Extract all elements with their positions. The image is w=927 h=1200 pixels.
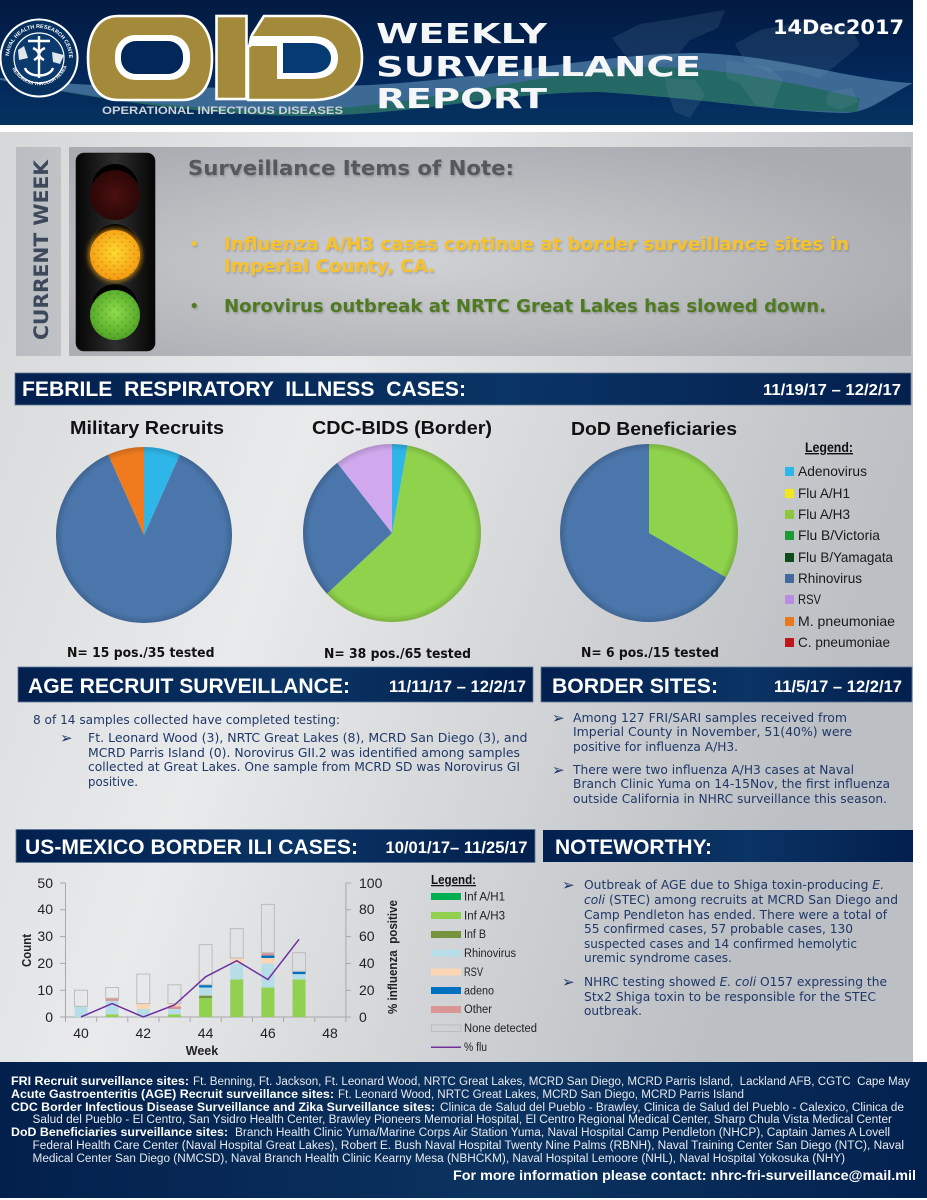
chart: border ILI cases by week bbox=[19, 875, 400, 1058]
right axis labels: 60 bbox=[359, 928, 375, 944]
left axis labels: 10 bbox=[37, 982, 53, 998]
week labels: 40 bbox=[73, 1025, 89, 1041]
heading: us-mexico border ili cases: 10/01/17– 11/25/17 bbox=[386, 839, 528, 857]
pie legend: Adenovirus bbox=[798, 463, 867, 479]
current week side label: CURRENT WEEK bbox=[30, 159, 53, 340]
panel: current week bbox=[16, 147, 911, 356]
pie legend: RSV bbox=[798, 591, 822, 607]
heading: age recruit surveillance bbox=[18, 667, 533, 702]
notes heading: Surveillance Items of Note: bbox=[188, 156, 514, 180]
chart title: CDC-BIDS (Border) bbox=[312, 418, 492, 438]
sample count: N= 6 pos./15 tested bbox=[581, 646, 719, 661]
text block: border sites: positive for influenza A/H3. bbox=[573, 740, 738, 754]
week labels: 44 bbox=[198, 1025, 214, 1041]
text block: noteworthy: NHRC testing showed E. coli O157 expressing the bbox=[584, 975, 887, 989]
text block: noteworthy: Outbreak of AGE due to Shiga toxin-producing E. bbox=[584, 878, 884, 892]
footer panel bbox=[0, 1062, 927, 1198]
heading: noteworthy bbox=[543, 830, 913, 862]
note: influenza, yellow: Imperial County, CA. bbox=[224, 257, 435, 277]
text block: noteworthy bbox=[562, 876, 898, 1018]
right axis labels bbox=[359, 875, 383, 1025]
text block: age recruit surveillance bbox=[33, 713, 528, 789]
chart legend: % flu bbox=[464, 1042, 487, 1054]
surveillance site lists: Acute Gastroenteritis (AGE) Recruit surveillance sites: bbox=[11, 1089, 334, 1101]
percent flu line bbox=[81, 939, 299, 1017]
current week side label bbox=[16, 147, 61, 356]
seal: Naval Health Research Center bbox=[0, 18, 78, 98]
pie legend: Flu B/Yamagata bbox=[798, 549, 893, 565]
chart legend: Inf A/H1 bbox=[464, 892, 505, 904]
note: influenza, yellow: • bbox=[189, 235, 199, 255]
surveillance site lists: Branch Health Clinic Yuma/Marine Corps Air Station Yuma, Naval Hospital Camp Pendleton (NHCP), Captain James A Lovell bbox=[235, 1127, 890, 1139]
week labels: 42 bbox=[136, 1025, 151, 1041]
chart legend: Inf A/H3 bbox=[464, 910, 505, 922]
left axis labels: 30 bbox=[37, 928, 53, 944]
surveillance site lists: CDC Border Infectious Disease Surveillance and Zika Surveillance sites: bbox=[11, 1102, 435, 1114]
pie legend: Flu A/H3 bbox=[798, 506, 850, 522]
pie chart: dod beneficiaries bbox=[560, 419, 738, 661]
text block: noteworthy: uremic syndrome cases. bbox=[584, 951, 732, 965]
surveillance notes panel background bbox=[69, 147, 911, 356]
heading: febrile respiratory illness cases bbox=[15, 373, 911, 405]
right axis labels: 100 bbox=[359, 875, 383, 891]
pie legend: Legend: bbox=[805, 439, 853, 455]
left axis labels: 50 bbox=[37, 875, 53, 891]
report title: WEEKLY bbox=[376, 18, 549, 50]
sample count: N= 38 pos./65 tested bbox=[324, 647, 471, 662]
logo caption: OPERATIONAL INFECTIOUS DISEASES bbox=[102, 105, 343, 117]
text block: age recruit surveillance: positive. bbox=[88, 775, 138, 789]
text block: noteworthy: coli (STEC) among recruits at MCRD San Diego and bbox=[584, 893, 898, 907]
right axis labels: 0 bbox=[359, 1009, 367, 1025]
axes bbox=[60, 883, 351, 1022]
week labels: 48 bbox=[322, 1025, 338, 1041]
heading: us-mexico border ili cases bbox=[16, 830, 535, 862]
text block: noteworthy: ➢ bbox=[562, 876, 575, 894]
page background bbox=[0, 132, 913, 1062]
count axis title: Count bbox=[19, 933, 34, 967]
surveillance site lists: FRI Recruit surveillance sites: bbox=[11, 1076, 189, 1088]
note: influenza, yellow bbox=[189, 235, 849, 277]
left axis labels: 40 bbox=[37, 901, 53, 917]
pie chart: cdc-bids border bbox=[303, 418, 492, 662]
week labels bbox=[73, 1025, 338, 1041]
heading: febrile respiratory illness cases: FEBRILE RESPIRATORY ILLNESS CASES: bbox=[22, 378, 466, 401]
chart legend: Rhinovirus bbox=[464, 948, 516, 960]
heading: border sites bbox=[541, 667, 912, 702]
text block: border sites: ➢ bbox=[552, 761, 565, 779]
text block: noteworthy: 55 confirmed cases, 57 probable cases, 130 bbox=[584, 922, 853, 936]
chart legend: Legend: bbox=[431, 873, 476, 887]
chart legend: RSV bbox=[464, 967, 483, 979]
text block: border sites bbox=[552, 709, 890, 806]
pie legend: M. pneumoniae bbox=[798, 613, 895, 629]
right axis labels: 40 bbox=[359, 955, 375, 971]
pie legend: C. pneumoniae bbox=[798, 634, 890, 650]
text block: border sites: Among 127 FRI/SARI samples received from bbox=[573, 711, 847, 725]
surveillance site lists bbox=[11, 1076, 910, 1165]
surveillance site lists: Clinica de Salud del Pueblo - Brawley, Clinica de Salud del Pueblo - Calexico, Clinica de bbox=[440, 1102, 904, 1114]
icon: traffic light bbox=[76, 153, 155, 351]
note: norovirus, green: Norovirus outbreak at NRTC Great Lakes has slowed down. bbox=[224, 297, 826, 317]
chart legend: Inf B bbox=[464, 929, 486, 941]
note: norovirus, green: • bbox=[189, 297, 199, 317]
text block: age recruit surveillance: ➢ bbox=[60, 729, 73, 747]
surveillance site lists: DoD Beneficiaries surveillance sites: bbox=[11, 1127, 228, 1139]
text block: noteworthy: Camp Pendleton has ended. There were a total of bbox=[584, 908, 888, 922]
text block: age recruit surveillance: MCRD Parris Island (0). Norovirus GII.2 was identified among samples bbox=[88, 746, 520, 760]
text block: noteworthy: outbreak. bbox=[584, 1004, 642, 1018]
text block: border sites: Branch Clinic Yuma on 14-15Nov, the first influenza bbox=[573, 777, 890, 791]
report title: SURVEILLANCE bbox=[376, 51, 701, 83]
text block: noteworthy: suspected cases and 14 confirmed hemolytic bbox=[584, 937, 857, 951]
heading: age recruit surveillance: 11/11/17 – 12/2/17 bbox=[389, 678, 526, 696]
chart title: DoD Beneficiaries bbox=[571, 419, 737, 439]
left axis labels: 20 bbox=[37, 955, 53, 971]
report date: 14Dec2017 bbox=[773, 16, 904, 39]
text block: border sites: There were two influenza A/H3 cases at Naval bbox=[572, 763, 854, 777]
percent axis title: % influenza positive bbox=[385, 900, 400, 1014]
heading: border sites: BORDER SITES: bbox=[552, 675, 718, 698]
header banner bbox=[0, 0, 913, 125]
surveillance site lists: Salud del Pueblo - El Centro, San Ysidro Health Center, Brawley Pioneers Memorial Hospital, El Centro Regional Medical Center, Sharp Chula Vista Medical Center bbox=[32, 1114, 892, 1126]
text block: border sites: ➢ bbox=[552, 709, 565, 727]
note: influenza, yellow: Influenza A/H3 cases continue at border surveillance sites in bbox=[224, 235, 849, 255]
surveillance site lists: Medical Center San Diego (NMCSD), Naval Branch Health Clinic Kearny Mesa (NBHCKM), Naval Hospital Lemoore (NHL), Naval Hospital Yokosuka (NHY) bbox=[32, 1153, 845, 1165]
pie legend: Flu B/Victoria bbox=[798, 527, 880, 543]
world map bbox=[612, 10, 860, 118]
surveillance site lists: Ft. Benning, Ft. Jackson, Ft. Leonard Wood, NRTC Great Lakes, MCRD San Diego, MCRD Parris Island, Lackland AFB, CGTC Cape May bbox=[193, 1076, 910, 1088]
pie legend: Rhinovirus bbox=[798, 570, 862, 586]
heading: noteworthy: NOTEWORTHY: bbox=[555, 836, 712, 859]
left axis labels bbox=[37, 875, 53, 1025]
left axis labels: 0 bbox=[45, 1009, 53, 1025]
report title bbox=[376, 18, 701, 115]
text block: age recruit surveillance: 8 of 14 samples collected have completed testing: bbox=[33, 713, 340, 727]
text block: age recruit surveillance: Ft. Leonard Wood (3), NRTC Great Lakes (8), MCRD San Diego (3), and bbox=[88, 731, 528, 745]
chart title: Military Recruits bbox=[70, 418, 224, 438]
text block: noteworthy: ➢ bbox=[562, 973, 575, 991]
text block: age recruit surveillance: collected at Great Lakes. One sample from MCRD SD was Norovirus GI bbox=[88, 760, 520, 774]
report title: REPORT bbox=[376, 83, 547, 115]
heading: febrile respiratory illness cases: 11/19/17 – 12/2/17 bbox=[763, 382, 901, 399]
heading: age recruit surveillance: AGE RECRUIT SURVEILLANCE: bbox=[28, 675, 350, 698]
text block: border sites: Imperial County in November, 51(40%) were bbox=[573, 725, 852, 739]
pie legend: Flu A/H1 bbox=[798, 485, 850, 501]
chart legend: adeno bbox=[464, 986, 494, 998]
surveillance site lists: Ft. Leonard Wood, NRTC Great Lakes, MCRD San Diego, MCRD Parris Island bbox=[338, 1089, 744, 1101]
contact line: For more information please contact: nhrc-fri-surveillance@mail.mil bbox=[453, 1167, 916, 1183]
right axis labels: 80 bbox=[359, 901, 375, 917]
week labels: 46 bbox=[260, 1025, 276, 1041]
week axis title: Week bbox=[186, 1044, 218, 1058]
chart legend: None detected bbox=[464, 1023, 537, 1035]
sample count: N= 15 pos./35 tested bbox=[67, 646, 214, 661]
chart legend bbox=[431, 873, 537, 1054]
pie chart: military recruits bbox=[56, 418, 232, 661]
text block: noteworthy: Stx2 Shiga toxin to be responsible for the STEC bbox=[584, 990, 876, 1004]
pie legend bbox=[785, 439, 895, 650]
heading: us-mexico border ili cases: US-MEXICO BORDER ILI CASES: bbox=[25, 836, 358, 859]
surveillance site lists: Federal Health Care Center (Naval Hospital Great Lakes), Robert E. Bush Naval Hospital Twenty Nine Palms (RBNH), Naval Training Center San Diego (NTC), Naval bbox=[32, 1140, 904, 1152]
heading: border sites: 11/5/17 – 12/2/17 bbox=[774, 678, 902, 696]
chart legend: Other bbox=[464, 1004, 492, 1016]
stacked bars bbox=[74, 904, 306, 1017]
right axis labels: 20 bbox=[359, 982, 375, 998]
OID logo bbox=[88, 16, 362, 100]
text block: border sites: outside California in NHRC surveillance this season. bbox=[573, 792, 887, 806]
